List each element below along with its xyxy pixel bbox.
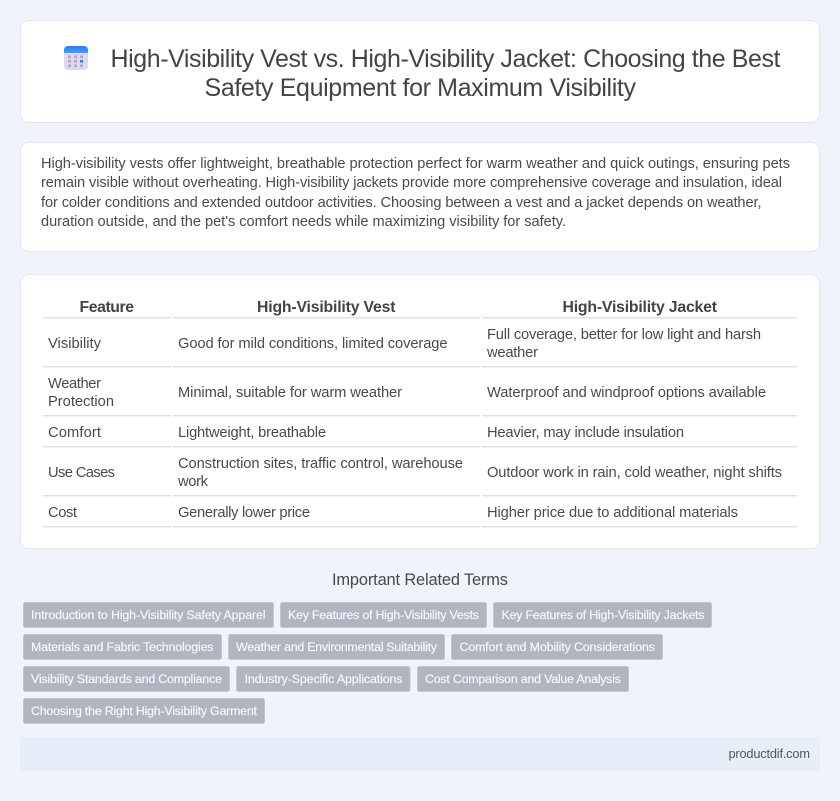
row: use cases: Use Cases	[48, 465, 115, 481]
tag: Choosing the Right High-Visibility Garment	[31, 704, 258, 718]
row: weather protection: Weather	[48, 376, 101, 392]
row: visibility: Full coverage, better for low light and harsh	[487, 327, 761, 343]
summary text	[41, 156, 790, 230]
table header: Feature	[80, 299, 134, 316]
table header	[80, 299, 718, 316]
row: cost	[48, 505, 738, 521]
tag	[228, 634, 444, 660]
icon: calendar	[64, 46, 88, 70]
tag	[280, 602, 486, 628]
row: weather protection: Protection	[48, 394, 114, 410]
row: weather protection: Waterproof and windproof options available	[487, 385, 766, 401]
tag: Comfort and Mobility Considerations	[460, 640, 655, 654]
row: visibility: Visibility	[48, 336, 102, 352]
tag: Cost Comparison and Value Analysis	[425, 672, 621, 686]
row: visibility: weather	[486, 345, 538, 361]
tag	[236, 666, 410, 692]
row: cost: Cost	[48, 505, 77, 521]
row: visibility	[48, 327, 761, 361]
tag: Introduction to High-Visibility Safety Apparel	[31, 608, 266, 622]
title	[110, 45, 781, 102]
tag	[418, 666, 628, 692]
row: use cases: work	[177, 474, 209, 490]
tag: Key Features of High-Visibility Jackets	[502, 608, 704, 622]
heading: related terms: Important Related Terms	[332, 571, 508, 589]
tag	[24, 634, 222, 660]
tag	[452, 634, 662, 660]
tag: Industry-Specific Applications	[244, 672, 402, 686]
tag: Key Features of High-Visibility Vests	[288, 608, 479, 622]
summary text: High-visibility vests offer lightweight, breathable protection perfect for warm weather and quick outings, ensuring pets	[41, 156, 790, 172]
summary text: for colder conditions and extended outdoor activities. Choosing between a vest and a jacket depends on weather,	[41, 195, 762, 211]
title: High-Visibility Vest vs. High-Visibility Jacket: Choosing the Best	[110, 45, 781, 73]
tag: Visibility Standards and Compliance	[31, 672, 222, 686]
table header: High-Visibility Vest	[257, 299, 396, 316]
title: Safety Equipment for Maximum Visibility	[204, 74, 636, 102]
footer	[20, 737, 820, 771]
related term tags	[24, 602, 712, 724]
row: weather protection	[48, 376, 766, 410]
summary text: remain visible without overheating. High-visibility jackets provide more comprehensive coverage and insulation, ideal	[41, 175, 782, 191]
tag: Materials and Fabric Technologies	[31, 640, 214, 654]
panel: comparison table	[20, 274, 820, 548]
row: use cases	[48, 456, 782, 490]
row: comfort: Heavier, may include insulation	[487, 425, 684, 441]
row: visibility: Good for mild conditions, limited coverage	[178, 336, 448, 352]
row: cost: Generally lower price	[178, 505, 310, 521]
row: comfort: Lightweight, breathable	[178, 425, 326, 441]
tag	[24, 666, 230, 692]
row: use cases: Outdoor work in rain, cold weather, night shifts	[487, 465, 782, 481]
footer: productdif.com	[728, 746, 810, 761]
tag: Weather and Environmental Suitability	[236, 640, 438, 654]
row: cost: Higher price due to additional materials	[487, 505, 738, 521]
row: weather protection: Minimal, suitable for warm weather	[178, 385, 402, 401]
row: comfort: Comfort	[48, 425, 101, 441]
row: use cases: Construction sites, traffic control, warehouse	[178, 456, 463, 472]
tag	[24, 698, 264, 724]
row: comfort	[48, 425, 684, 441]
panel: summary	[20, 142, 820, 252]
table header: High-Visibility Jacket	[562, 299, 718, 316]
tag	[24, 602, 274, 628]
tag	[494, 602, 712, 628]
header panel	[20, 20, 820, 122]
summary text: duration outside, and the pet's comfort needs while maximizing visibility for safety.	[41, 214, 566, 230]
